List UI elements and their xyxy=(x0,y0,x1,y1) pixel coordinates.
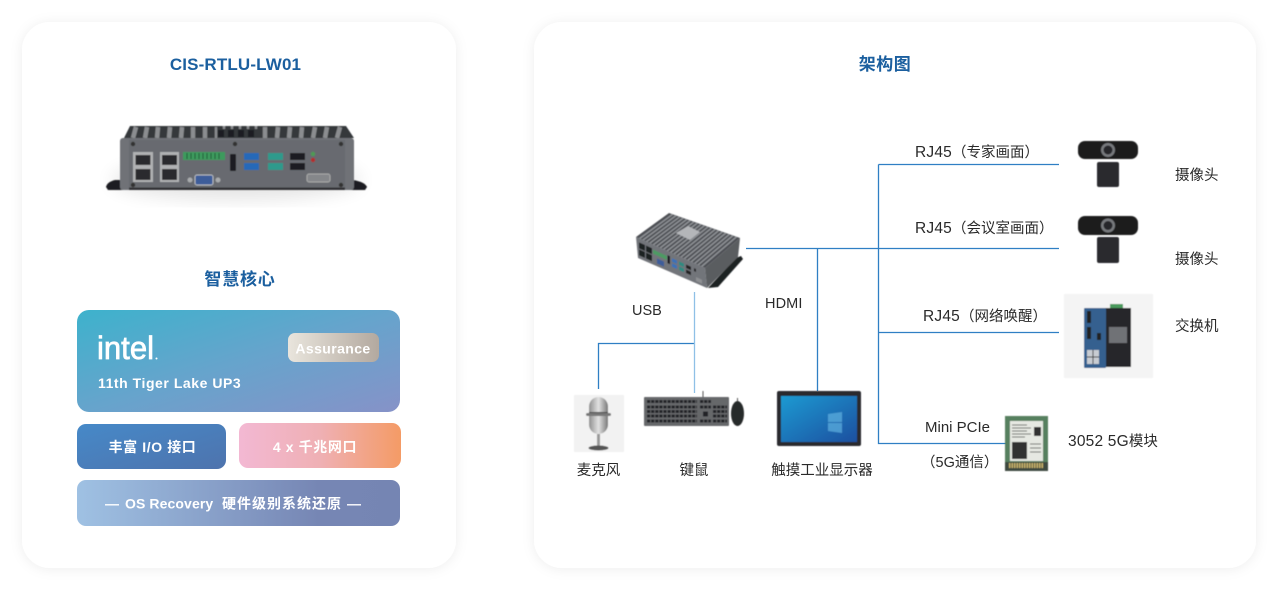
button: os recovery: — xyxy=(347,496,361,512)
button: os recovery: 硬件级别系统还原 xyxy=(222,496,342,512)
label: rj45 wake on lan: RJ45（网络唤醒） xyxy=(923,308,1047,325)
label: camera 1: 摄像头 xyxy=(1175,167,1218,184)
button: gigabit ports: 4 x 千兆网口 xyxy=(273,439,357,455)
label: switch: 交换机 xyxy=(1175,317,1219,335)
icon: 5g module xyxy=(1005,416,1048,471)
icon: touch display xyxy=(777,391,861,446)
panel: product xyxy=(22,22,456,568)
label: mini pcie: Mini PCIe xyxy=(925,419,990,436)
text: processor name: 11th Tiger Lake UP3 xyxy=(98,375,241,391)
button: os recovery: OS Recovery xyxy=(125,496,213,512)
button: os recovery: — xyxy=(105,496,119,512)
button: gigabit ports xyxy=(239,423,401,468)
label: camera 2: 摄像头 xyxy=(1175,251,1218,268)
label: 5g module: 3052 5G模块 xyxy=(1068,433,1158,450)
label: rj45 meeting room view: RJ45（会议室画面） xyxy=(915,220,1053,237)
card: intel processor xyxy=(77,310,400,412)
button: rich io: 丰富 I/O 接口 xyxy=(109,439,196,455)
button: os recovery xyxy=(77,480,400,526)
label: 5g communication: （5G通信） xyxy=(921,454,998,471)
label: microphone: 麦克风 xyxy=(577,462,621,479)
label: usb: USB xyxy=(632,303,662,319)
label: touch display: 触摸工业显示器 xyxy=(771,462,873,479)
icon: microphone xyxy=(574,395,624,452)
button: rich io xyxy=(77,424,226,469)
product photo: front view xyxy=(106,126,367,200)
icon: industrial pc xyxy=(636,213,743,288)
icon: keyboard and mouse xyxy=(644,391,744,426)
label: keyboard and mouse: 键鼠 xyxy=(680,462,708,479)
icon: network switch xyxy=(1064,294,1153,378)
logo: intel: intel xyxy=(97,330,154,366)
label: rj45 expert view: RJ45（专家画面） xyxy=(915,144,1039,161)
connection lines xyxy=(598,164,1059,444)
badge: assurance: Assurance xyxy=(295,340,371,356)
panel: architecture xyxy=(534,22,1256,568)
icon: camera 2 xyxy=(1078,216,1138,263)
label: hdmi: HDMI xyxy=(765,296,802,312)
title: model name: CIS-RTLU-LW01 xyxy=(170,55,301,74)
heading: smart core: 智慧核心 xyxy=(204,269,276,289)
icon: camera 1 xyxy=(1078,141,1138,187)
heading: architecture: 架构图 xyxy=(859,55,911,74)
badge: assurance xyxy=(288,333,379,362)
